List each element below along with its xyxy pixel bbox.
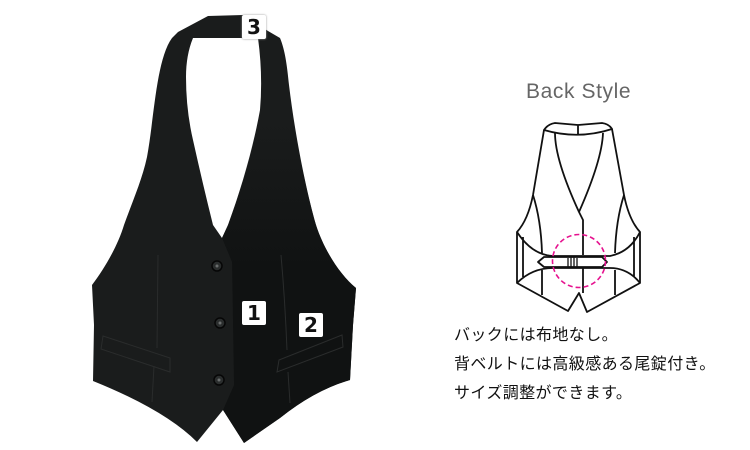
badge 1 xyxy=(242,301,266,325)
pocket and seam details xyxy=(101,255,343,403)
outer outline xyxy=(517,129,640,312)
badge 2: 2 xyxy=(304,313,318,337)
description line 3: サイズ調整ができます。 xyxy=(454,379,632,403)
dashed highlight circle xyxy=(552,234,606,288)
badge 2 xyxy=(299,313,323,337)
buttons xyxy=(212,261,225,385)
description line 1: バックには布地なし。 xyxy=(454,321,618,345)
belt strap xyxy=(538,257,607,267)
badge 3: 3 xyxy=(247,15,261,39)
buckle xyxy=(568,257,577,268)
badge 1: 1 xyxy=(247,301,261,325)
heading: Back Style: Back Style xyxy=(526,80,631,103)
darts xyxy=(533,195,624,295)
placket shadow xyxy=(222,100,356,443)
badge 3 xyxy=(242,15,266,39)
vest body xyxy=(92,15,356,443)
belt edges xyxy=(517,232,640,283)
collar xyxy=(544,123,612,135)
V neck and centre line xyxy=(555,133,603,293)
description line 2: 背ベルトには高級感ある尾錠付き。 xyxy=(454,350,716,374)
